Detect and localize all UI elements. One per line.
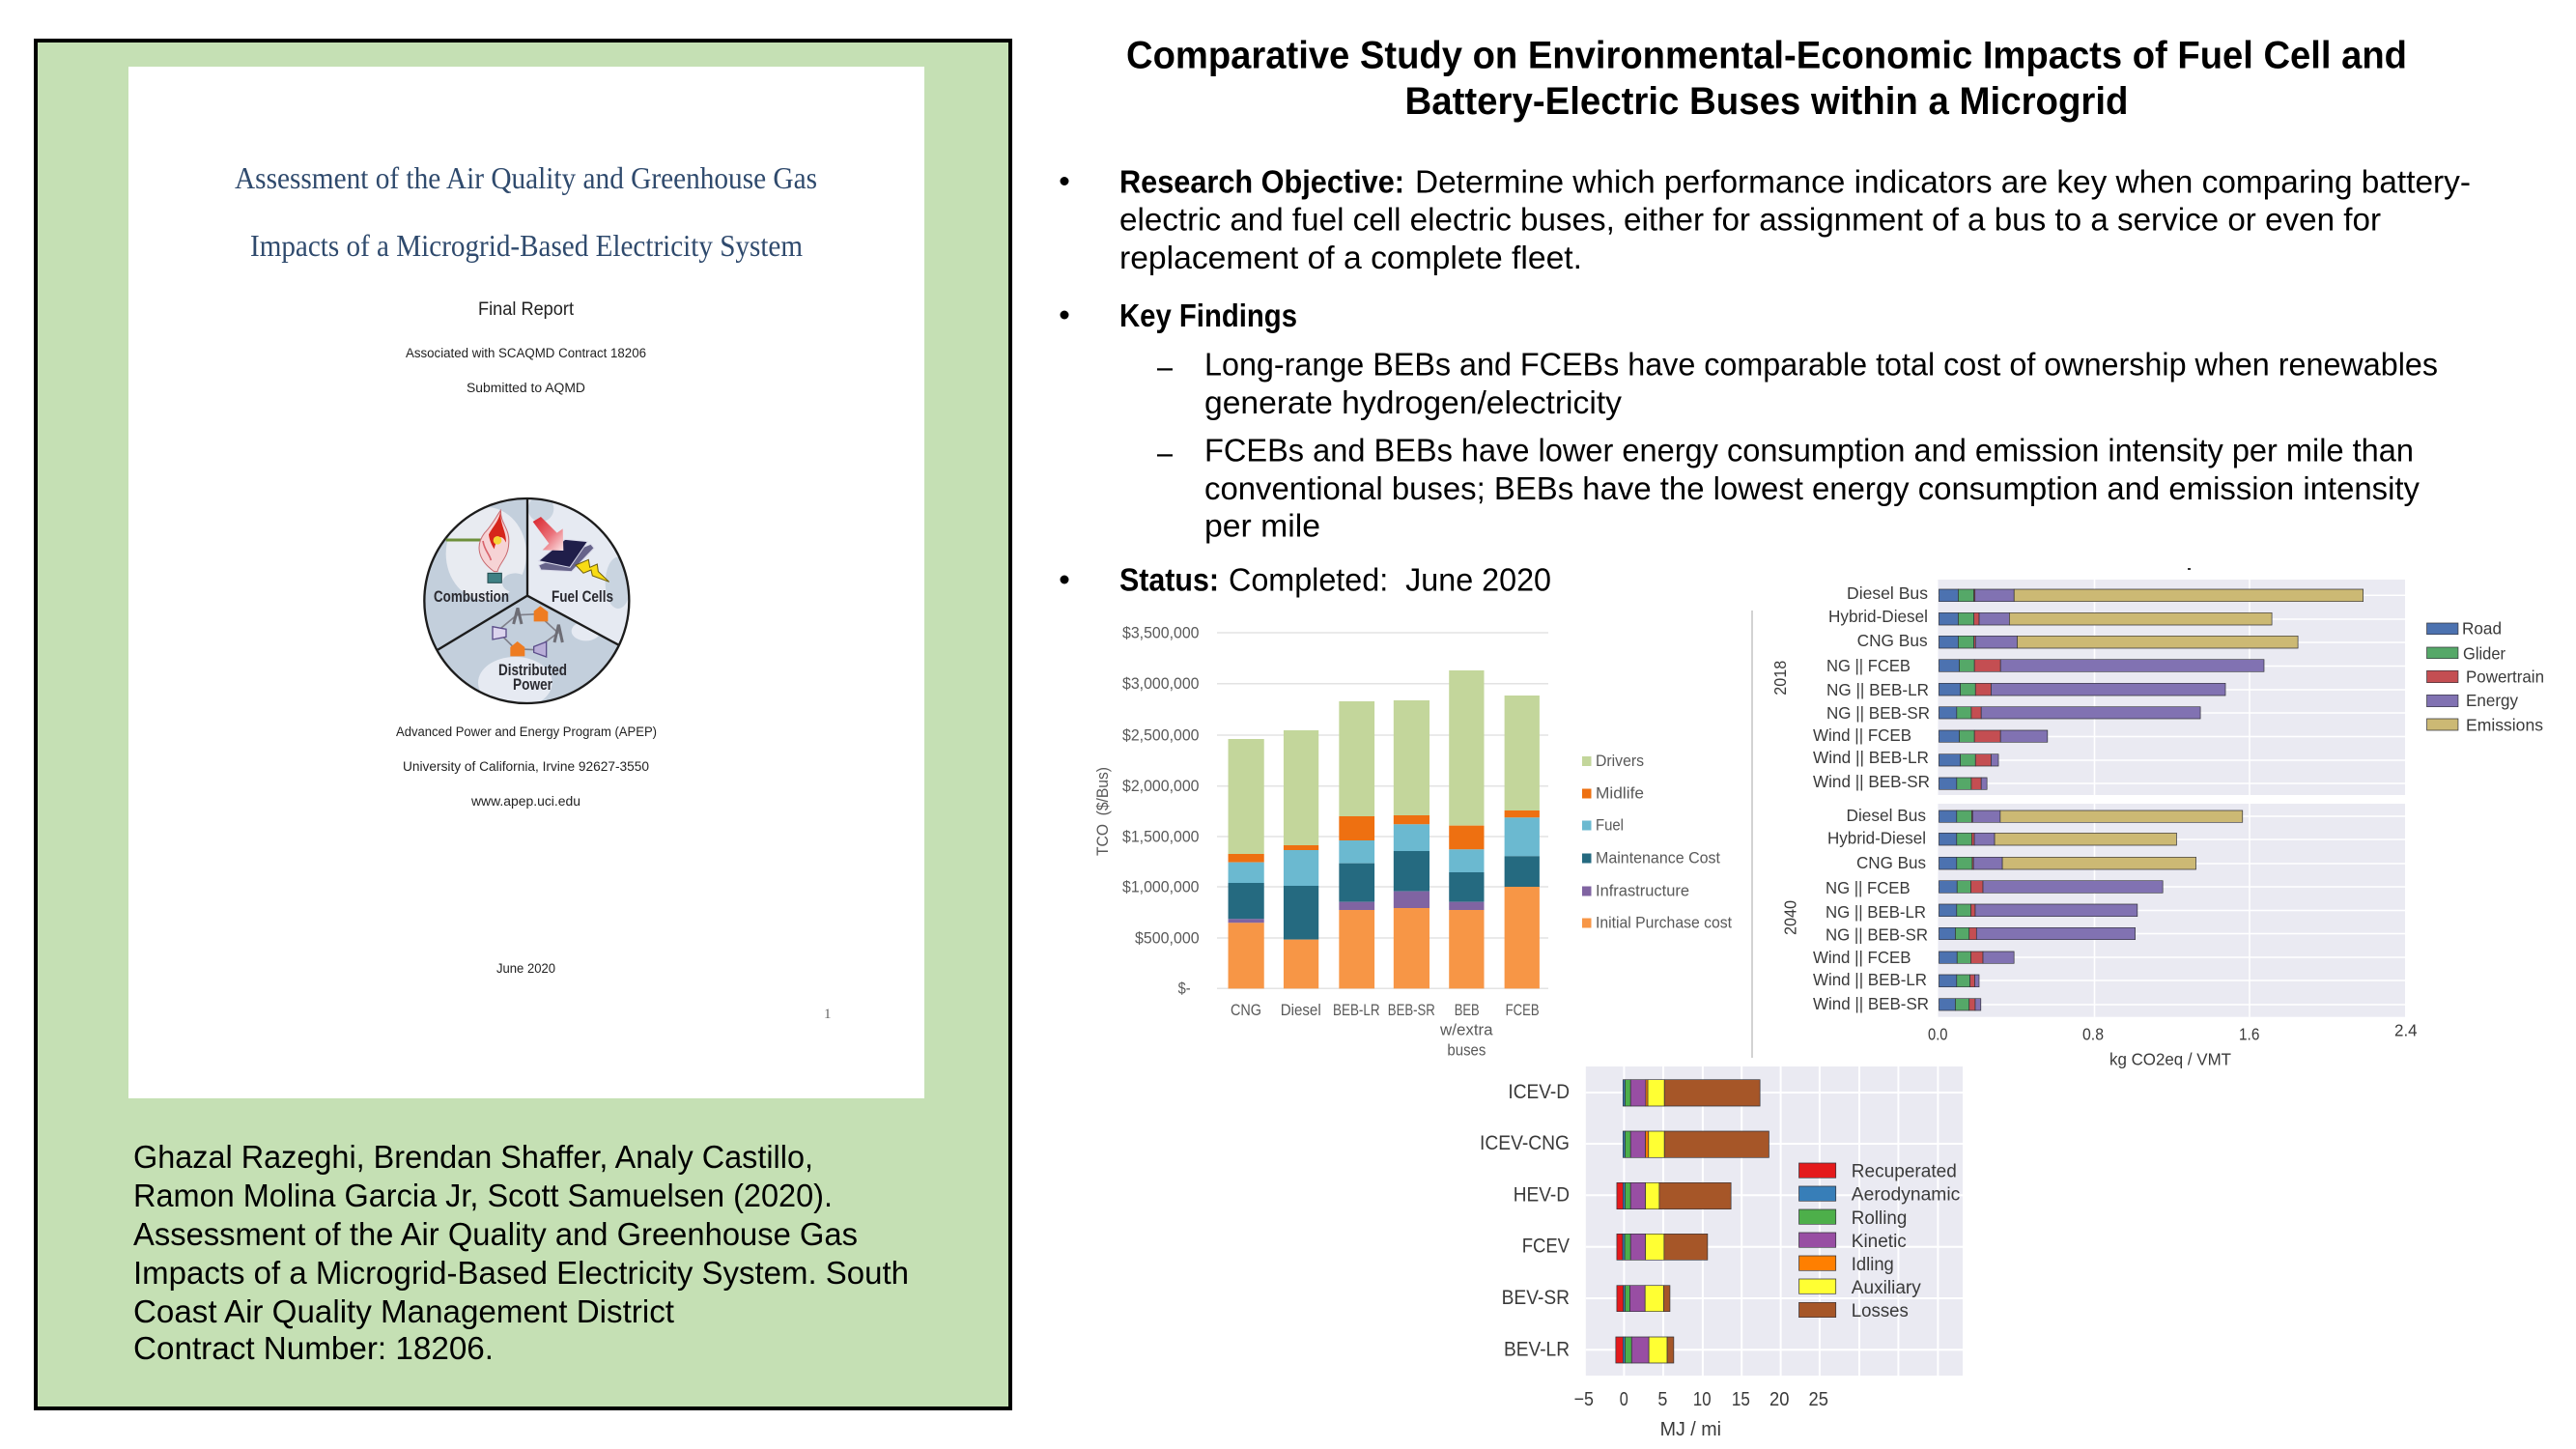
category labels 2018: NG || FCEB xyxy=(1826,656,1911,675)
x axis ticks and title: kg CO2eq / VMT xyxy=(2109,1049,2231,1068)
legend: Powertrain xyxy=(2466,668,2544,687)
category labels 2018: Hybrid-Diesel xyxy=(1828,607,1928,626)
y axis title: TCO ($/Bus) xyxy=(1094,767,1112,856)
panel: 2040 emissions bars xyxy=(1781,804,2405,1017)
x axis ticks and title: 1.6 xyxy=(2239,1024,2259,1043)
icon: combustion, fuel cells, distributed power logo: Combustion xyxy=(434,587,509,606)
legend xyxy=(1582,753,1732,931)
legend: Auxiliary xyxy=(1852,1278,1921,1298)
report cover page xyxy=(128,67,924,1098)
text block: status: Completed: June 2020 xyxy=(1229,562,1551,598)
report title: Impacts of a Microgrid-Based Electricity System xyxy=(250,228,803,263)
text block: key findings: Key Findings xyxy=(1119,298,1297,333)
x axis ticks and title: 20 xyxy=(1769,1389,1789,1410)
report subtitle block xyxy=(406,299,646,395)
x axis labels: buses xyxy=(1447,1041,1486,1059)
category labels: FCEV xyxy=(1522,1235,1570,1258)
legend: Idling xyxy=(1852,1255,1894,1275)
category labels 2018: CNG Bus xyxy=(1857,631,1928,650)
x axis labels: FCEB xyxy=(1506,1002,1540,1019)
text block: research objective xyxy=(1061,164,2471,275)
category labels 2040: NG || BEB-LR xyxy=(1826,902,1926,922)
report subtitle block: Associated with SCAQMD Contract 18206 xyxy=(406,346,646,360)
text block: research objective: electric and fuel cell electric buses, either for assignment of a bus to a service or even for xyxy=(1119,201,2381,237)
y axis ticks: $2,500,000 xyxy=(1122,726,1200,744)
stacked bars xyxy=(1229,670,1540,988)
year label 2040: 2040 xyxy=(1781,900,1800,935)
category labels xyxy=(1480,1081,1570,1360)
report subtitle block: Final Report xyxy=(478,299,575,320)
x axis labels: CNG xyxy=(1231,1002,1261,1019)
text block: research objective: Determine which performance indicators are key when comparing battery- xyxy=(1415,164,2471,200)
report publisher block: University of California, Irvine 92627-3550 xyxy=(403,759,649,774)
x axis labels: w/extra xyxy=(1439,1022,1493,1039)
finding: energy consumption and emissions: – xyxy=(1157,435,1174,470)
category labels 2040: NG || FCEB xyxy=(1826,878,1911,897)
legend: Midlife xyxy=(1596,784,1644,802)
x axis ticks and title: 10 xyxy=(1693,1389,1712,1410)
x axis ticks and title: 25 xyxy=(1808,1389,1828,1410)
x axis ticks and title: 5 xyxy=(1657,1389,1667,1410)
x axis ticks and title: −5 xyxy=(1574,1389,1594,1410)
report publisher block: 1 xyxy=(824,1007,831,1022)
x axis ticks and title: 15 xyxy=(1732,1389,1750,1410)
citation text: Ramon Molina Garcia Jr, Scott Samuelsen (2020). xyxy=(133,1178,833,1213)
legend xyxy=(2427,618,2544,734)
category labels 2040: Wind || BEB-SR xyxy=(1813,994,1929,1013)
y axis ticks: $3,500,000 xyxy=(1122,624,1200,641)
icon: combustion, fuel cells, distributed power logo: Power xyxy=(513,675,552,694)
x axis labels: Diesel xyxy=(1281,1002,1321,1019)
y axis ticks xyxy=(1122,624,1200,997)
category labels 2040: Wind || BEB-LR xyxy=(1813,970,1927,989)
y axis ticks: $2,000,000 xyxy=(1122,778,1200,795)
x axis ticks and title: 0.8 xyxy=(2082,1024,2104,1043)
chart: total cost of ownership stacked bars xyxy=(1094,624,1732,1059)
icon: combustion, fuel cells, distributed power logo: Fuel Cells xyxy=(552,587,613,606)
legend: Losses xyxy=(1852,1301,1909,1321)
stacked bars xyxy=(1616,1080,1769,1363)
x axis ticks and title xyxy=(1928,1020,2418,1068)
legend: Aerodynamic xyxy=(1852,1185,1960,1206)
finding: total cost of ownership: – xyxy=(1157,349,1174,384)
category labels 2018 xyxy=(1813,583,1930,791)
year label 2018: 2018 xyxy=(1770,661,1790,696)
citation text: Ghazal Razeghi, Brendan Shaffer, Analy Castillo, xyxy=(133,1139,813,1175)
category labels 2018: NG || BEB-SR xyxy=(1826,703,1930,723)
citation text: Assessment of the Air Quality and Greenhouse Gas xyxy=(133,1216,858,1252)
x axis ticks and title: 0.0 xyxy=(1928,1024,1948,1043)
category labels 2018: Wind || BEB-LR xyxy=(1813,748,1929,767)
title xyxy=(1126,34,2407,123)
finding: total cost of ownership: Long-range BEBs and FCEBs have comparable total cost of ownership when renewables xyxy=(1204,347,2438,383)
panel: 2018 emissions bars xyxy=(1770,580,2405,795)
category labels 2018: Wind || BEB-SR xyxy=(1813,772,1930,791)
legend: Energy xyxy=(2466,691,2518,710)
citation text: Impacts of a Microgrid-Based Electricity System. South xyxy=(133,1255,909,1291)
text block: research objective: Research Objective: xyxy=(1119,164,1404,200)
x axis ticks and title: MJ / mi xyxy=(1660,1419,1721,1440)
text block: key findings xyxy=(1061,298,2438,544)
x axis ticks and title xyxy=(1574,1389,1828,1440)
x axis labels: BEB-LR xyxy=(1333,1002,1380,1019)
legend xyxy=(1798,1162,1960,1321)
category labels 2040: Wind || FCEB xyxy=(1813,948,1911,967)
category labels 2018: NG || BEB-LR xyxy=(1826,680,1929,699)
citation text xyxy=(133,1139,909,1366)
title: Battery-Electric Buses within a Microgrid xyxy=(1404,80,2129,123)
x axis labels: BEB-SR xyxy=(1388,1002,1435,1019)
category labels 2040: NG || BEB-SR xyxy=(1826,925,1928,945)
legend: Initial Purchase cost xyxy=(1596,914,1732,931)
y axis ticks: $- xyxy=(1178,980,1191,997)
legend: Fuel xyxy=(1596,817,1624,835)
citation text: Coast Air Quality Management District xyxy=(133,1293,674,1329)
finding: energy consumption and emissions: conventional buses; BEBs have the lowest energy consumption and emission intensity xyxy=(1204,470,2420,506)
category labels 2040 xyxy=(1813,806,1929,1013)
legend: Emissions xyxy=(2466,715,2543,734)
x axis labels: BEB xyxy=(1455,1002,1480,1019)
category labels: ICEV-CNG xyxy=(1480,1132,1570,1154)
panel: report citation xyxy=(36,41,1010,1408)
citation text: Contract Number: 18206. xyxy=(133,1330,494,1366)
category labels 2018: Diesel Bus xyxy=(1847,583,1928,603)
x axis labels xyxy=(1231,1002,1540,1059)
legend: Infrastructure xyxy=(1596,883,1689,900)
chart: energy use per mile xyxy=(1480,1066,1963,1440)
icon: combustion, fuel cells, distributed power logo: Distributed xyxy=(498,661,567,679)
stacked bars 2018 xyxy=(1939,589,2364,789)
legend: Maintenance Cost xyxy=(1596,850,1720,867)
category labels 2018: Wind || FCEB xyxy=(1813,725,1911,745)
text block: status xyxy=(1061,562,1551,598)
chart: life-cycle emissions per vehicle mile xyxy=(1770,580,2544,1068)
title: Comparative Study on Environmental-Economic Impacts of Fuel Cell and xyxy=(1126,34,2407,76)
finding: energy consumption and emissions: per mile xyxy=(1204,508,1320,544)
report publisher block: Advanced Power and Energy Program (APEP) xyxy=(396,724,657,739)
legend: Glider xyxy=(2463,643,2505,663)
text block: research objective: replacement of a complete fleet. xyxy=(1119,240,1582,275)
category labels 2040: Diesel Bus xyxy=(1847,806,1926,825)
report title: Assessment of the Air Quality and Greenhouse Gas xyxy=(235,160,817,195)
text block: status: Status: xyxy=(1119,562,1219,598)
icon: combustion, fuel cells, distributed power logo xyxy=(424,496,640,708)
x axis ticks and title: 0 xyxy=(1620,1389,1628,1410)
legend: Recuperated xyxy=(1852,1162,1957,1182)
report publisher block: www.apep.uci.edu xyxy=(470,794,580,809)
legend: Rolling xyxy=(1852,1208,1907,1229)
y axis ticks: $1,500,000 xyxy=(1122,829,1200,846)
category labels: HEV-D xyxy=(1514,1184,1570,1206)
y axis ticks: $3,000,000 xyxy=(1122,675,1200,693)
category labels 2040: CNG Bus xyxy=(1856,853,1926,872)
x axis ticks and title: 2.4 xyxy=(2394,1020,2418,1039)
stacked bars 2040 xyxy=(1939,810,2243,1010)
legend: Road xyxy=(2462,618,2502,638)
finding: total cost of ownership: generate hydrogen/electricity xyxy=(1204,384,1623,420)
y axis ticks: $500,000 xyxy=(1135,929,1200,947)
report publisher block xyxy=(396,724,831,1022)
legend: Kinetic xyxy=(1852,1232,1907,1252)
finding: energy consumption and emissions: FCEBs and BEBs have lower energy consumption and emission intensity per mile than xyxy=(1204,433,2414,469)
category labels: BEV-LR xyxy=(1504,1339,1570,1360)
category labels: BEV-SR xyxy=(1502,1287,1570,1309)
finding: energy consumption and emissions xyxy=(1157,433,2420,544)
report subtitle block: Submitted to AQMD xyxy=(467,381,585,395)
finding: total cost of ownership xyxy=(1157,347,2438,420)
report title xyxy=(235,160,817,263)
report publisher block: June 2020 xyxy=(496,961,555,976)
legend: Drivers xyxy=(1596,753,1644,770)
y axis ticks: $1,000,000 xyxy=(1122,879,1200,896)
category labels: ICEV-D xyxy=(1508,1081,1570,1103)
category labels 2040: Hybrid-Diesel xyxy=(1827,829,1926,848)
